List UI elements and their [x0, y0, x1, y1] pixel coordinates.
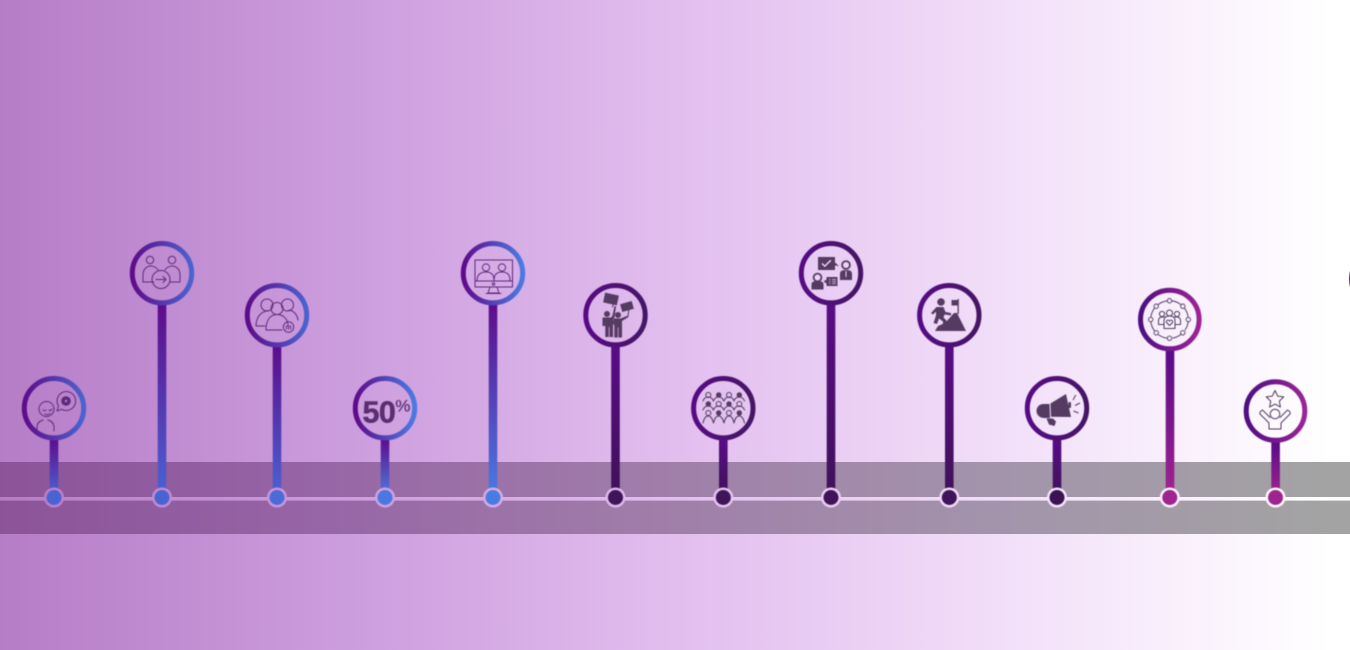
stem 9: [945, 345, 954, 496]
stem 12: [1271, 440, 1280, 496]
label: 50 percent: 50: [362, 396, 395, 430]
marker 6: protesters: [586, 286, 645, 508]
ring 1: [24, 378, 84, 438]
marker 11: community ring with heart: [1140, 290, 1199, 508]
icon: team with m badge: [256, 299, 298, 332]
timeline dot 7: [713, 488, 733, 508]
icon: two people with boards: [812, 257, 852, 290]
label: 50 percent: %: [395, 396, 410, 416]
timeline axis: [0, 497, 1350, 501]
marker 3: team with badge: [247, 286, 307, 508]
timeline dot 10: [1047, 488, 1067, 508]
icon: crowd of people: [703, 392, 744, 423]
timeline dot 5: [483, 488, 503, 508]
timeline dot 9: [939, 488, 959, 508]
ring 2: [132, 244, 192, 303]
ring 6: [586, 286, 645, 345]
icon: climber and flag: [931, 298, 966, 331]
ring 10: [1027, 378, 1087, 438]
ring 4: [355, 378, 415, 438]
ring 3: [247, 286, 307, 345]
marker 2: group with arrow: [132, 244, 192, 508]
stem 1: [50, 438, 58, 496]
marker 7: crowd: [694, 378, 753, 508]
stem 6: [611, 345, 620, 496]
timeline dot 6: [606, 488, 626, 508]
timeline dot 1: [44, 488, 64, 508]
icon: protesters with signs: [602, 293, 634, 338]
stem 8: [827, 303, 835, 496]
timeline dot 3: [267, 488, 287, 508]
stem 2: [158, 303, 166, 496]
ring 11: [1140, 290, 1199, 349]
marker 9: climber on mountain: [920, 286, 979, 508]
timeline dot 8: [821, 488, 841, 508]
icon: person with gear: [37, 391, 76, 431]
timeline dot 2: [152, 488, 172, 508]
marker 1: person with gear speech bubble: [24, 378, 84, 508]
grey horizontal band: [0, 462, 1350, 534]
marker 10: megaphone: [1027, 378, 1087, 508]
ring 7: [694, 378, 753, 438]
timeline dot 12: [1266, 488, 1286, 508]
stem 4: [381, 438, 389, 496]
marker 8: coaching discussion: [801, 244, 861, 508]
ring 12: [1246, 382, 1305, 440]
stem 5: [489, 303, 497, 496]
ring 9: [920, 286, 979, 345]
icon: star above cheering person: [1260, 390, 1290, 429]
icon: monitor with two people: [475, 260, 512, 294]
marker 5: video call monitor: [463, 244, 523, 508]
icon: community ring: [1148, 298, 1190, 340]
stem 3: [273, 345, 281, 496]
stem 11: [1166, 349, 1174, 496]
ring 8: [801, 244, 861, 303]
timeline dot 4: [375, 488, 395, 508]
icon: group with arrow: [143, 256, 180, 288]
marker 4: 50 percent: [355, 378, 415, 508]
stem 10: [1053, 438, 1061, 496]
ring 5: [463, 244, 523, 303]
icon: team with m badge: m: [285, 324, 292, 332]
timeline dot 11: [1160, 488, 1180, 508]
marker 12: person with star: [1246, 382, 1305, 508]
stem 7: [719, 438, 728, 496]
icon: megaphone: [1036, 394, 1080, 426]
